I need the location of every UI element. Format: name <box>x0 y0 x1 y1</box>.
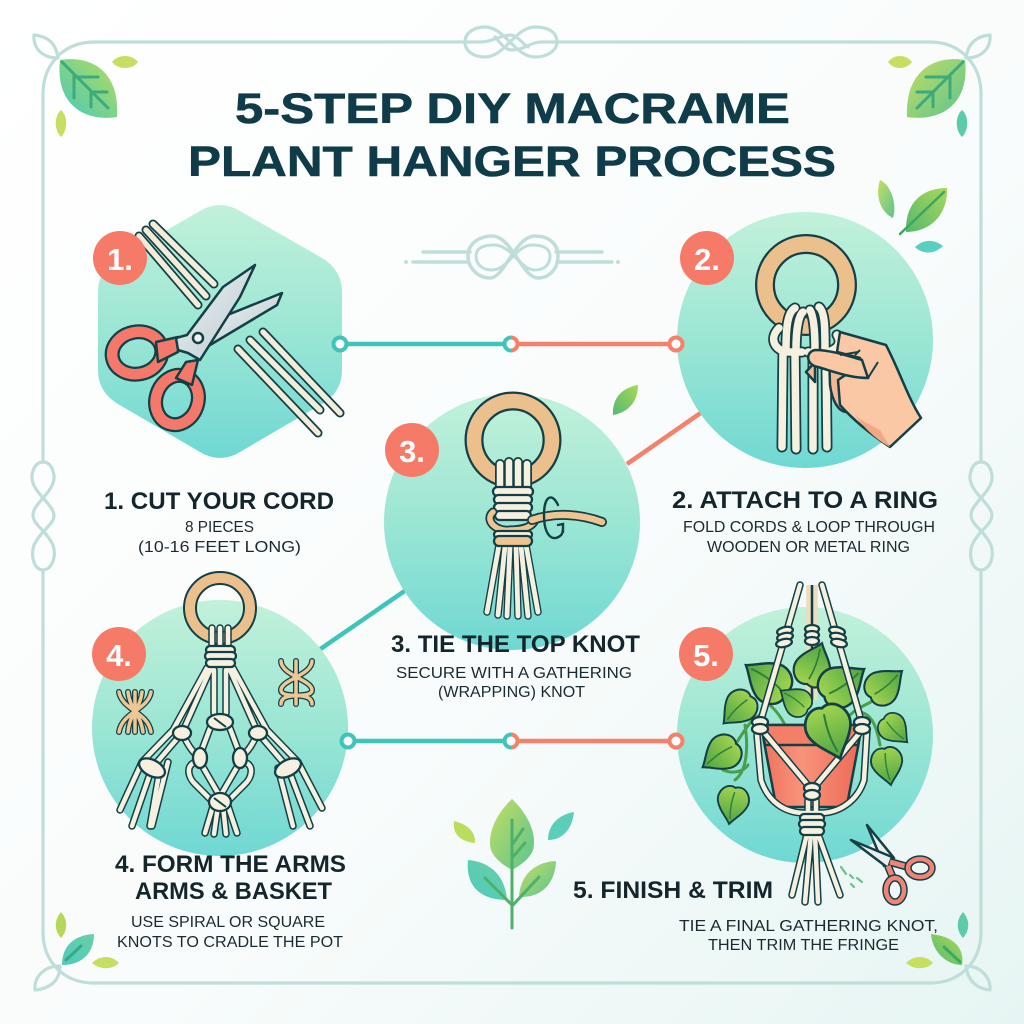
icon: hand <box>806 332 921 447</box>
cords through ring <box>774 307 839 449</box>
badge: number 3 <box>385 423 439 477</box>
text block: step 4: 4. FORM THE ARMS <box>115 851 346 878</box>
center hanging cord <box>808 585 816 700</box>
icon: top-right corner leaves <box>888 56 967 137</box>
working cord and rotation arrow <box>532 497 602 538</box>
text block: step 1: 8 PIECES <box>185 519 254 536</box>
panel: step 5 finish and trim <box>677 585 933 902</box>
knots <box>136 646 304 811</box>
text block: step 5: TIE A FINAL GATHERING KNOT, <box>679 918 938 935</box>
badge: number 5 <box>679 627 733 681</box>
wooden ring <box>474 401 552 479</box>
wooden ring <box>765 244 847 326</box>
text block: step 3: SECURE WITH A GATHERING <box>396 665 632 682</box>
text block: step 1: (10-16 FEET LONG) <box>138 539 301 556</box>
leaves behind cords <box>693 637 917 827</box>
badge: number 4: 4. <box>106 638 132 673</box>
panel: step 2 attach to ring <box>677 212 933 468</box>
text block: step 3 <box>391 631 640 701</box>
badge: number 2: 2. <box>694 242 720 277</box>
vines <box>723 695 880 780</box>
panel: step 1 cut cord <box>93 205 342 458</box>
icon: small scissors <box>851 825 932 902</box>
text block: step 1: 1. CUT YOUR CORD <box>104 488 334 515</box>
connector: step 1 to step 2 <box>334 338 682 351</box>
connector: step 4 to step 5 <box>342 734 682 748</box>
connector: step 3 to step 4 <box>319 590 406 650</box>
macrame net cords <box>120 628 322 834</box>
terracotta pot <box>761 725 862 807</box>
icon: top-left corner leaves <box>56 56 138 137</box>
badge: number 4 <box>92 627 146 681</box>
text block: step 2: 2. ATTACH TO A RING <box>672 487 938 514</box>
text block: step 5 <box>573 877 938 954</box>
icon: central sprout <box>454 799 574 928</box>
fringe cords <box>487 462 538 616</box>
connector: step 2 to step 3 <box>627 412 702 464</box>
text block: step 1 <box>104 488 334 556</box>
title <box>188 85 836 186</box>
icon: bottom-left corner leaves <box>56 912 119 968</box>
badge: number 2 <box>680 231 734 285</box>
trimmed bits <box>841 867 862 887</box>
panel: step 3 top knot <box>384 394 640 650</box>
text block: step 4: USE SPIRAL OR SQUARE <box>131 914 325 931</box>
hexagon background <box>98 205 342 458</box>
text block: step 2: FOLD CORDS & LOOP THROUGH <box>683 519 935 536</box>
text block: step 5: THEN TRIM THE FRINGE <box>708 937 899 954</box>
icon: square knot detail left <box>119 692 151 732</box>
front leaf <box>800 699 862 766</box>
icon: floating leaves top right <box>878 180 947 253</box>
text block: step 2 <box>672 487 938 556</box>
badge: number 5: 5. <box>693 638 719 673</box>
knot ornament <box>404 236 620 278</box>
badge: number 1: 1. <box>107 242 133 277</box>
wooden ring <box>190 578 250 638</box>
text block: step 4: ARMS & BASKET <box>135 878 332 905</box>
hanging and cradle cords <box>757 585 867 902</box>
badge: number 1 <box>93 231 147 285</box>
knots <box>752 625 870 835</box>
text block: step 4: KNOTS TO CRADLE THE POT <box>117 934 343 951</box>
icon: scissors <box>108 265 282 430</box>
title: 5-STEP DIY MACRAME <box>235 85 790 133</box>
wrapping coils <box>490 487 534 546</box>
cords <box>139 224 340 433</box>
text block: step 3: 3. TIE THE TOP KNOT <box>391 631 640 658</box>
text block: step 3: (WRAPPING) KNOT <box>438 684 585 701</box>
icon: bottom-right corner leaves <box>906 912 968 968</box>
text block: step 5: 5. FINISH & TRIM <box>573 877 773 904</box>
icon: spiral knot detail right <box>281 661 312 704</box>
text block: step 4 <box>115 851 346 951</box>
badge: number 3: 3. <box>399 434 425 469</box>
text block: step 2: WOODEN OR METAL RING <box>707 539 910 556</box>
icon: small leaf near step 3 <box>613 385 638 415</box>
title: PLANT HANGER PROCESS <box>188 138 836 186</box>
panel: step 4 arms and basket <box>92 578 348 856</box>
